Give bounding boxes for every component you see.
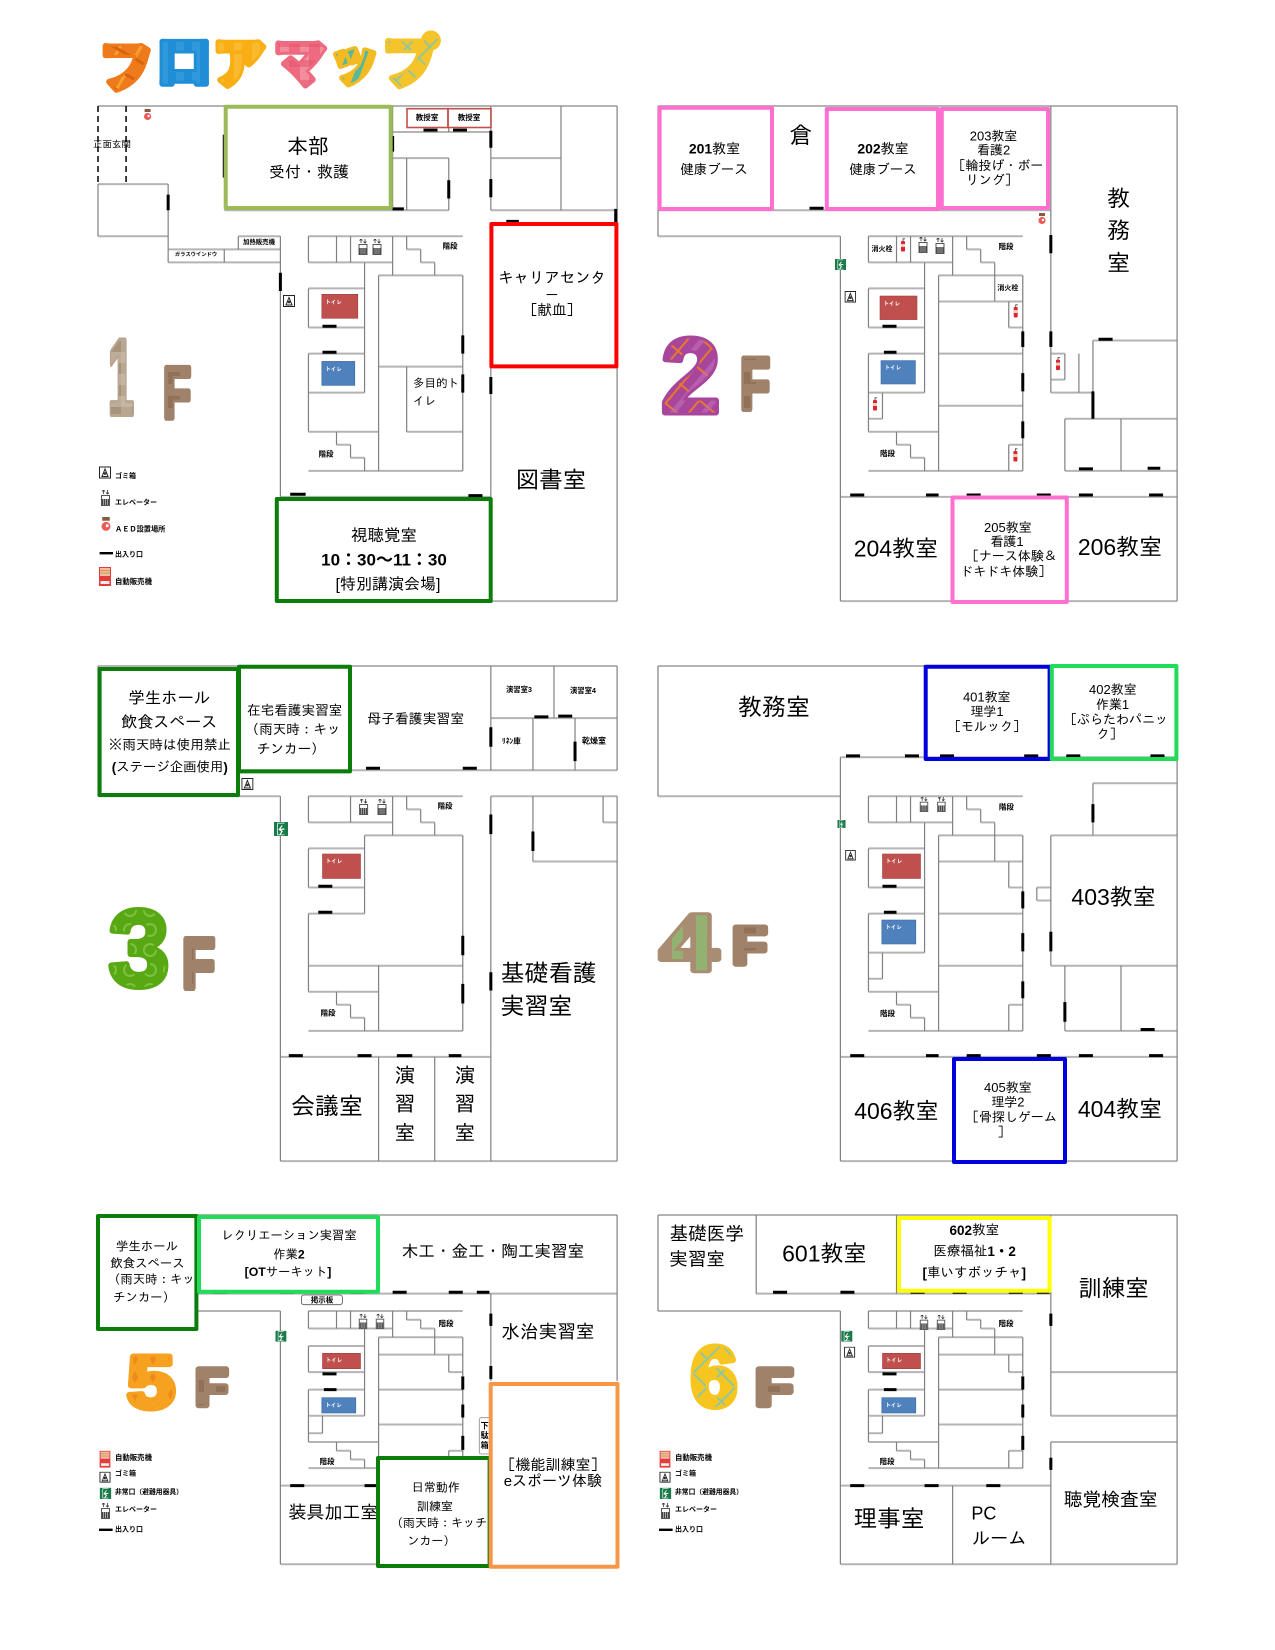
room labels 6F: PC <box>971 1503 996 1523</box>
restroom red 2F <box>880 296 917 320</box>
room labels 2F: リング］ <box>966 172 1018 188</box>
room labels 5F: チンカー） <box>113 1290 175 1304</box>
room labels 4F: 406教室 <box>854 1098 939 1124</box>
restroom red 6F <box>882 1353 920 1369</box>
legend 5F: 自動販売機 <box>115 1453 153 1462</box>
icons 2F <box>835 213 1060 462</box>
room labels 2F: 203教室 <box>970 128 1017 143</box>
room labels 1F: ー <box>546 288 558 302</box>
room labels 2F: 階段 <box>880 448 895 458</box>
room labels 5F <box>108 1229 606 1548</box>
frames 1F <box>226 107 616 601</box>
room labels 2F: ［輪投げ・ボー <box>952 158 1043 173</box>
icons 5F <box>275 1314 384 1342</box>
floor plan walls 4F <box>658 666 1177 1161</box>
legend 6F: エレベーター <box>675 1504 717 1514</box>
room labels 3F: 演習室3 <box>506 685 532 694</box>
restroom red 1F: トイレ <box>325 299 342 306</box>
legend 5F: 非常口（避難用器具） <box>115 1487 183 1496</box>
room labels 1F: 教授室 <box>458 112 481 122</box>
room labels 6F <box>669 1222 1158 1548</box>
room labels 1F: 視聴覚室 <box>351 527 417 545</box>
restroom blue 2F <box>881 361 915 384</box>
title <box>99 18 439 102</box>
room labels 1F: ガラスウインドウ <box>175 250 217 258</box>
legend 1F: 出入り口 <box>115 550 143 558</box>
legend 6F: 出入り口 <box>675 1524 703 1534</box>
floor number 1F: F <box>163 354 191 434</box>
room labels 1F: 受付・救護 <box>269 164 349 182</box>
room labels 2F: ［ナース体験＆ <box>966 548 1057 564</box>
room labels 2F: ドキドキ体験］ <box>960 564 1051 579</box>
frames 3F <box>100 667 350 795</box>
room labels 2F: 202教室 <box>857 140 909 156</box>
room labels 1F: 多目的ト <box>413 377 459 390</box>
room labels 5F: 木工・金工・陶工実習室 <box>402 1242 584 1261</box>
legend 5F <box>99 1451 183 1534</box>
floor number 3F <box>109 888 215 1010</box>
floor number 4F <box>660 898 767 987</box>
frames 2F <box>660 108 1067 602</box>
room labels 2F: 消火栓 <box>997 283 1018 292</box>
room labels 3F: チンカー） <box>257 742 325 756</box>
restroom blue 5F: トイレ <box>325 1402 342 1409</box>
room labels 5F: 飲食スペース <box>110 1257 185 1271</box>
room labels 1F: 教授室 <box>416 112 439 122</box>
room labels 3F: 室 <box>395 1122 415 1145</box>
room labels 2F: 階段 <box>998 241 1014 251</box>
room labels 2F: 看護1 <box>990 534 1024 549</box>
room labels 5F: ［機能訓練室］ <box>500 1457 606 1474</box>
room labels 2F: 教 <box>1107 186 1130 212</box>
panel: 1F <box>93 106 617 601</box>
room labels 1F: 10：30～11：30 <box>321 550 447 570</box>
panel: 4F <box>658 666 1177 1162</box>
room labels 1F: [特別講演会場] <box>336 576 440 594</box>
frames 4F <box>926 666 1176 1162</box>
room labels 2F: 健康ブース <box>680 162 748 177</box>
room labels 4F: 403教室 <box>1071 884 1156 910</box>
panel: 5F <box>98 1215 618 1567</box>
floor number 5F: F <box>195 1359 228 1417</box>
legend 6F: 非常口（避難用器具） <box>675 1487 743 1496</box>
room labels 4F: 階段 <box>999 802 1014 812</box>
room labels 2F: 倉 <box>789 122 812 148</box>
title: フ <box>99 24 153 102</box>
room labels 5F: eスポーツ体験 <box>504 1473 602 1490</box>
room labels 4F: 405教室 <box>984 1080 1032 1095</box>
restroom blue 6F <box>882 1398 916 1413</box>
room labels 4F: ［ぷらたわパニッ <box>1064 712 1168 727</box>
restroom red 4F: トイレ <box>886 858 902 865</box>
room labels 5F: 日常動作 <box>412 1480 460 1494</box>
room labels 3F: 演習室4 <box>570 686 597 695</box>
notice board 5F: 掲示板 <box>311 1294 334 1304</box>
room labels 6F: 602教室 <box>950 1222 999 1238</box>
floor number 2F <box>661 318 770 436</box>
floor number 6F: 6 <box>690 1330 738 1425</box>
room labels 1F: イレ <box>413 396 436 408</box>
room labels 5F: 階段 <box>320 1456 335 1466</box>
restroom blue 4F: トイレ <box>885 924 902 931</box>
floor number 3F: 3 <box>109 888 169 1010</box>
panel: 2F <box>658 106 1177 602</box>
icons 3F <box>242 778 386 836</box>
room labels 6F: 聴覚検査室 <box>1064 1489 1158 1510</box>
legend 6F <box>659 1451 743 1534</box>
legend 6F: ゴミ箱 <box>675 1468 696 1478</box>
restroom red 3F <box>322 854 360 878</box>
shoe box 5F <box>479 1418 491 1454</box>
room labels 5F: [OTサーキット] <box>245 1265 331 1279</box>
room labels 5F: （雨天時：キッチ <box>391 1516 487 1530</box>
room labels 5F: 作業2 <box>273 1248 305 1262</box>
room labels 1F: 階段 <box>442 240 458 250</box>
room labels 3F: 乾燥室 <box>582 736 606 746</box>
room labels 4F: ］ <box>998 1124 1010 1140</box>
room labels 5F: （雨天時：キッ <box>108 1272 195 1286</box>
room labels 2F: 健康ブース <box>849 162 917 177</box>
room labels 3F: 演 <box>455 1064 475 1088</box>
room labels 6F: 基礎医学 <box>670 1223 744 1244</box>
restroom red 5F: トイレ <box>326 1357 342 1364</box>
room labels 3F: 飲食スペース <box>121 714 217 732</box>
room labels 4F: 教務室 <box>738 694 810 722</box>
room labels 1F: 階段 <box>318 448 334 458</box>
restroom blue 5F <box>322 1398 356 1413</box>
floor number 6F <box>690 1330 793 1425</box>
legend 6F: 自動販売機 <box>675 1453 713 1462</box>
notice board 5F <box>301 1294 342 1305</box>
room labels 5F: 学生ホール <box>116 1240 178 1254</box>
room labels 4F: 404教室 <box>1078 1096 1162 1122</box>
room labels 4F <box>738 682 1168 1140</box>
room labels 5F: 階段 <box>438 1318 454 1328</box>
restroom blue 4F <box>882 920 916 944</box>
title: プ <box>383 18 439 100</box>
title: マ <box>274 22 326 96</box>
panel: 3F <box>98 666 617 1161</box>
room labels 4F: 作業1 <box>1096 697 1129 712</box>
room labels 6F: 医療福祉1・2 <box>933 1244 1016 1258</box>
room labels 1F: 正面玄関 <box>93 140 131 150</box>
restroom red 2F: トイレ <box>884 301 900 308</box>
legend 1F: ゴミ箱 <box>115 471 136 480</box>
floor number 3F: F <box>182 925 215 1004</box>
floor number 4F: 4 <box>660 898 719 987</box>
legend 1F: ＡＥＤ設置場所 <box>115 524 165 534</box>
room labels 5F: 訓練室 <box>417 1500 453 1514</box>
room labels 4F: 401教室 <box>963 690 1011 704</box>
room labels 4F: ［モルック］ <box>948 719 1026 734</box>
room labels 1F: ［献血］ <box>523 303 581 319</box>
frame 6F <box>899 1218 1050 1291</box>
room labels 2F: 看護2 <box>977 142 1010 158</box>
room labels 3F: 階段 <box>320 1008 336 1018</box>
floor plan walls 5F <box>196 1215 617 1564</box>
room labels 3F: 学生ホール <box>128 690 210 708</box>
restroom red 3F: トイレ <box>326 858 342 865</box>
icons 1F <box>144 109 381 306</box>
restroom red 4F <box>882 854 920 878</box>
room labels 5F: 水治実習室 <box>501 1321 594 1342</box>
restroom red 5F <box>322 1353 360 1369</box>
room labels 1F <box>93 112 606 594</box>
room labels 6F: 階段 <box>998 1318 1014 1328</box>
shoe box 5F: 駄 <box>481 1430 489 1440</box>
room labels 3F <box>109 685 606 1145</box>
legend 1F: エレベーター <box>115 498 157 506</box>
shoe box 5F: 下 <box>481 1422 489 1430</box>
room labels 2F: 206教室 <box>1078 534 1162 560</box>
room labels 3F: 在宅看護実習室 <box>247 703 342 718</box>
restroom red 1F <box>322 294 358 318</box>
legend 1F: 自動販売機 <box>115 577 153 586</box>
floor plan walls 6F <box>658 1215 1177 1564</box>
shoe box 5F: 箱 <box>481 1440 489 1450</box>
room labels 2F: 室 <box>1107 250 1130 276</box>
room labels 6F: [車いすボッチャ] <box>923 1265 1026 1280</box>
floor number 6F: F <box>755 1359 793 1417</box>
room labels 4F: ［骨探しゲーム <box>966 1110 1057 1124</box>
room labels 1F: 図書室 <box>516 467 586 493</box>
room labels 3F: ※雨天時は使用禁止 <box>109 738 231 752</box>
floor plan walls 3F <box>98 666 617 1161</box>
panel: 6F <box>658 1215 1177 1564</box>
room labels 6F: 階段 <box>880 1456 895 1466</box>
room labels 1F: キャリアセンタ <box>498 270 606 287</box>
room labels 3F: （雨天時：キッ <box>245 722 341 737</box>
title: ア <box>213 22 265 98</box>
room labels 2F: 務 <box>1107 218 1130 244</box>
floor number 2F: F <box>740 344 770 425</box>
room labels 4F: 402教室 <box>1089 682 1137 697</box>
icons 4F <box>838 797 945 860</box>
room labels 5F: レクリエーション実習室 <box>221 1229 357 1243</box>
room labels 3F: 実習室 <box>500 994 572 1020</box>
room labels 3F: ﾘﾈﾝ庫 <box>502 736 521 746</box>
legend 5F: ゴミ箱 <box>115 1468 136 1478</box>
frames 5F <box>98 1216 618 1567</box>
room labels 1F: 本部 <box>287 136 329 158</box>
room labels 2F: 201教室 <box>689 140 740 156</box>
room labels 3F: (ステージ企画使用) <box>112 760 228 774</box>
floor number 2F: 2 <box>661 318 720 436</box>
room labels 4F: 理学2 <box>991 1094 1025 1110</box>
room labels 2F: 204教室 <box>854 535 938 561</box>
floor plan walls 1F <box>98 106 617 601</box>
floor number 5F: 5 <box>127 1341 175 1424</box>
room labels 5F: ンカー） <box>407 1534 455 1548</box>
room labels 5F: 装具加工室 <box>288 1502 378 1522</box>
room labels 3F: 習 <box>455 1093 475 1116</box>
floor number 4F: F <box>732 917 767 976</box>
restroom blue 6F: トイレ <box>885 1402 902 1409</box>
title: ロ <box>156 18 212 100</box>
room labels 4F: ク］ <box>1097 726 1123 742</box>
room labels 3F: 母子看護実習室 <box>367 712 464 726</box>
room labels 3F: 演 <box>395 1064 415 1088</box>
room labels 3F: 室 <box>455 1122 475 1145</box>
room labels 1F: 加熱販売機 <box>243 237 276 246</box>
title: ッ <box>329 22 379 94</box>
room labels 6F: 実習室 <box>669 1248 725 1270</box>
room labels 2F: 205教室 <box>984 520 1032 535</box>
legend 5F: エレベーター <box>115 1504 157 1514</box>
room labels 3F: 習 <box>395 1093 415 1116</box>
icons 6F <box>841 1315 945 1357</box>
room labels 3F: 基礎看護 <box>501 960 597 988</box>
floor number 5F <box>127 1341 228 1424</box>
room labels 6F: ルーム <box>972 1528 1026 1548</box>
restroom blue 1F: トイレ <box>325 366 342 373</box>
room labels 6F: 訓練室 <box>1078 1275 1149 1301</box>
room labels 4F: 階段 <box>880 1008 895 1018</box>
room labels 3F: 階段 <box>438 800 453 810</box>
room labels 3F: 会議室 <box>291 1094 363 1120</box>
room labels 2F: 消火栓 <box>872 244 892 253</box>
room labels 6F: 理事室 <box>853 1507 925 1533</box>
room labels 2F <box>680 122 1162 579</box>
room labels 4F: 理学1 <box>970 704 1004 719</box>
restroom blue 1F <box>322 361 355 385</box>
legend 5F: 出入り口 <box>115 1524 143 1534</box>
floor plan walls 2F <box>658 106 1177 601</box>
restroom red 6F: トイレ <box>886 1357 902 1364</box>
restroom blue 2F: トイレ <box>885 365 901 372</box>
room labels 6F: 601教室 <box>782 1240 866 1266</box>
floor number 1F: 1 <box>108 317 134 437</box>
legend 1F <box>99 467 165 586</box>
